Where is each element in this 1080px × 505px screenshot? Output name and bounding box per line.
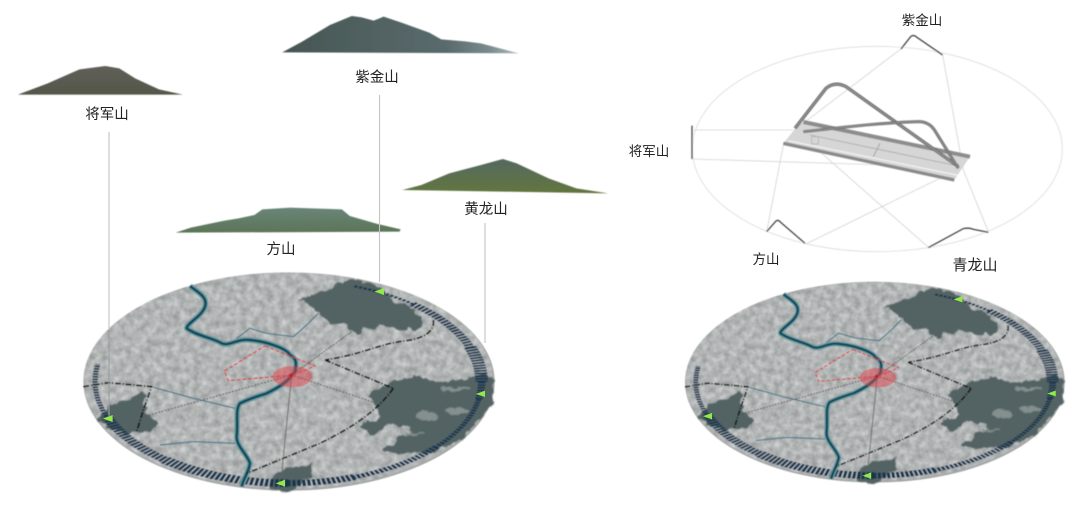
sight lines [692, 48, 988, 247]
mountain profiles [692, 36, 988, 248]
leader lines [109, 95, 485, 417]
label: 方山: 方山 [266, 241, 296, 258]
label: 方山 (right): 方山 [752, 252, 780, 267]
label: 紫金山 (right): 紫金山 [902, 13, 942, 28]
sight ellipse [692, 46, 1062, 252]
label: 紫金山: 紫金山 [355, 69, 399, 86]
right sightline diagram [692, 36, 1062, 252]
bridge plaza [783, 123, 970, 180]
mountain: 方山 [176, 208, 401, 233]
mountain: 紫金山 [282, 16, 519, 53]
left city map disc [83, 272, 495, 491]
mountain: 黄龙山 [402, 159, 608, 193]
right city map disc [685, 282, 1065, 483]
arched loops [795, 84, 958, 168]
label: 黄龙山: 黄龙山 [464, 201, 508, 218]
label: 将军山 (right): 将军山 [629, 144, 669, 159]
label: 将军山: 将军山 [85, 106, 129, 123]
label: 青龙山 (right): 青龙山 [952, 257, 998, 274]
mountain: 将军山 [18, 66, 183, 95]
